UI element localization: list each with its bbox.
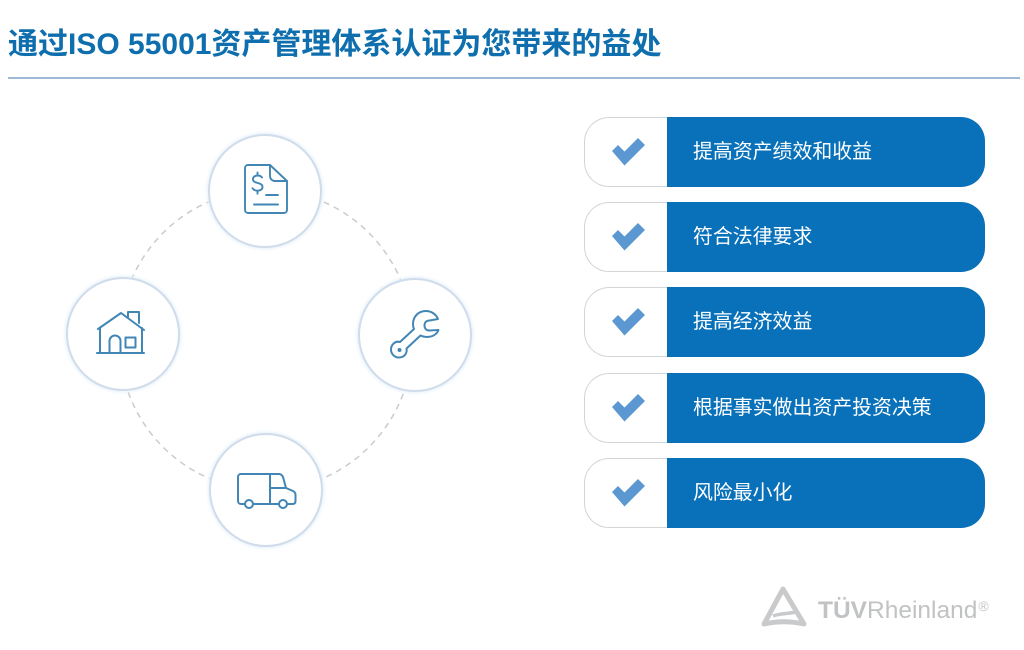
logo: TÜV Rheinland: [762, 586, 989, 626]
benefit row 2: [584, 202, 985, 272]
benefit row 5: [584, 458, 985, 528]
cycle diagram: [64, 132, 474, 549]
node: wrench: [359, 279, 471, 391]
node: finance document: [209, 135, 321, 247]
node: delivery truck: [210, 434, 322, 546]
icon: logo triangle: [762, 586, 806, 626]
logo wordmark: TÜVRheinland®: [818, 597, 989, 624]
icon: house: [97, 312, 144, 353]
icon: truck: [238, 474, 296, 508]
benefit row 4: 根据事实做出资产投资决策: [693, 397, 932, 419]
benefit row 3: 提高经济效益: [693, 311, 812, 333]
icon: wrench: [391, 311, 438, 358]
benefit row 1: 提高资产绩效和收益: [693, 141, 872, 163]
benefit row 4: [584, 373, 985, 443]
benefit row 3: [584, 287, 985, 357]
benefit row 1: [584, 117, 985, 187]
node: house: [67, 278, 179, 390]
icon: document with dollar sign: [245, 165, 287, 213]
title: 通过ISO 55001资产管理体系认证为您带来的益处: [8, 28, 661, 61]
benefit row 2: 符合法律要求: [693, 226, 812, 248]
benefit row 5: 风险最小化: [693, 482, 792, 504]
